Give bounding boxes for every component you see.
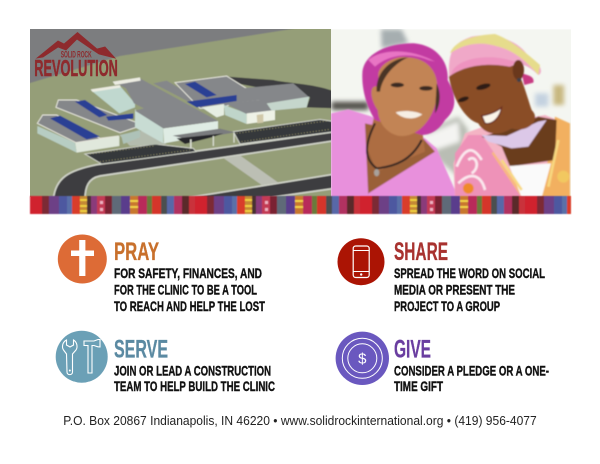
icon: dollar coin: $ (358, 350, 367, 368)
parking lots (85, 144, 196, 164)
road loop (53, 132, 335, 200)
panel: give: GIVE (394, 336, 431, 364)
panel: serve: TEAM TO HELP BUILD THE CLINIC (114, 378, 275, 394)
right wings (154, 80, 192, 102)
panel: share: MEDIA OR PRESENT THE (394, 282, 515, 298)
panel: pray (58, 234, 265, 314)
woman 2 (453, 115, 570, 198)
image: aerial rendering of clinic (27, 27, 335, 200)
woman 1 (331, 109, 458, 198)
logo: Solid Rock Revolution: SOLID ROCK (61, 50, 92, 60)
decorative woven strip (30, 196, 571, 214)
icon: dollar coin (336, 332, 389, 385)
icon: cross (58, 234, 107, 284)
panel: serve: JOIN OR LEAD A CONSTRUCTION (114, 362, 271, 378)
panel: share (338, 238, 545, 314)
panel: pray: FOR THE CLINIC TO BE A TOOL (114, 282, 257, 298)
panel: pray: FOR SAFETY, FINANCES, AND (114, 265, 262, 281)
panel: serve (56, 331, 275, 394)
logo: Solid Rock Revolution: REVOLUTION (34, 55, 118, 81)
icon: mountains (37, 32, 115, 58)
panel: pray: TO REACH AND HELP THE LOST (114, 298, 265, 314)
image: two smiling women in scrubs (331, 29, 571, 198)
panel: pray: PRAY (114, 238, 159, 266)
icon: smartphone (338, 238, 384, 285)
panel: share: PROJECT TO A GROUP (394, 298, 500, 314)
icon: wrench and hammer (56, 331, 108, 383)
footer contact line: P.O. Box 20867 Indianapolis, IN 46220 • www.solidrockinternational.org • (419) 956-4077 (63, 414, 537, 428)
left wings (37, 126, 77, 153)
canopy (173, 129, 235, 140)
panel: give: TIME GIFT (394, 378, 443, 394)
logo: Solid Rock Revolution (34, 32, 118, 81)
central building (91, 86, 135, 113)
panel: serve: SERVE (114, 336, 168, 364)
panel: give (336, 332, 549, 394)
panel: share: SHARE (394, 238, 448, 266)
